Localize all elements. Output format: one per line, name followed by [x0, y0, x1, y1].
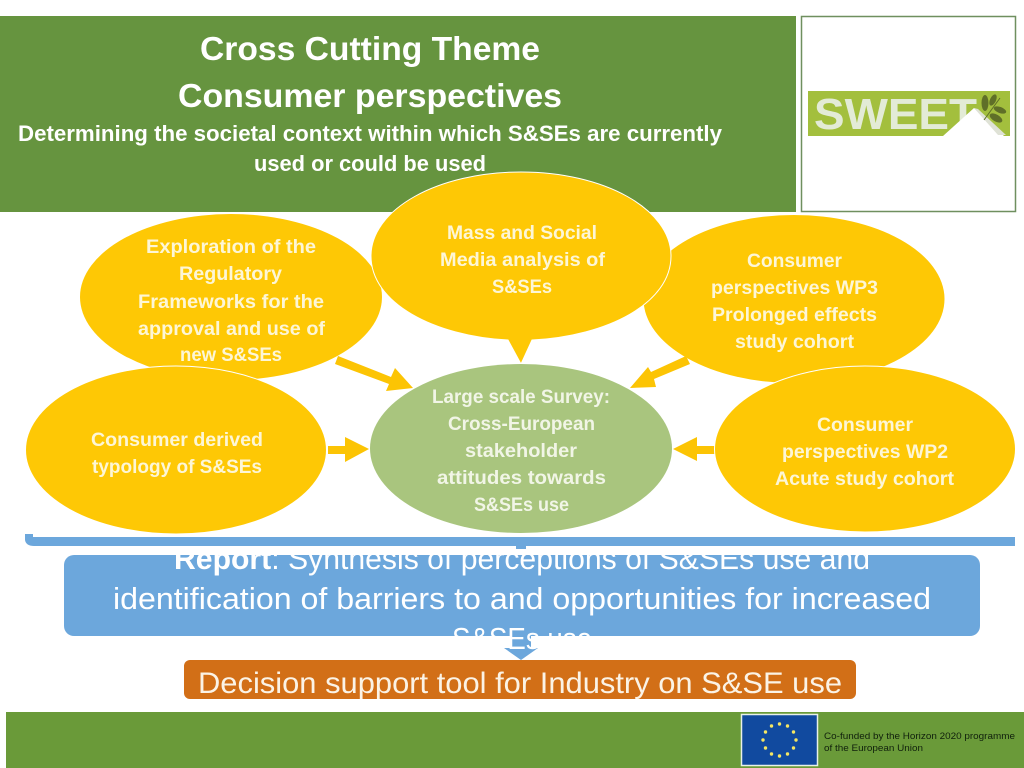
title — [178, 30, 562, 114]
bracket — [25, 534, 1015, 549]
oval: large scale survey: stakeholder — [465, 440, 577, 462]
funding note: Co-funded by the Horizon 2020 programme — [824, 731, 1015, 742]
callout: mass and social media analysis: Mass and Social — [447, 222, 597, 244]
oval: consumer derived typology: Consumer derived — [91, 429, 263, 451]
panel: report: Report: Synthesis of perceptions of S&SEs use and — [174, 541, 870, 576]
oval: consumer perspectives WP2: perspectives WP2 — [782, 441, 948, 463]
oval: consumer derived typology — [26, 366, 326, 534]
panel: report — [64, 541, 980, 656]
oval: regulatory frameworks: new S&SEs — [180, 344, 282, 366]
panel: SWEET logo — [802, 16, 1016, 212]
footer — [6, 712, 1024, 768]
oval: consumer perspectives WP3: Prolonged effects — [712, 304, 877, 326]
subtitle: Determining the societal context within which S&SEs are currently — [18, 121, 722, 146]
oval: large scale survey: S&SEs use — [474, 494, 569, 516]
panel: report: identification of barriers to and opportunities for increased — [113, 581, 931, 616]
icon: EU flag — [742, 714, 818, 766]
header banner — [0, 16, 796, 212]
oval: consumer perspectives WP3: perspectives WP3 — [711, 277, 878, 299]
arrow: typology to survey — [328, 437, 369, 462]
arrow: WP2 to survey — [673, 437, 715, 461]
oval: regulatory frameworks: Frameworks for the — [138, 291, 324, 313]
callout: mass and social media analysis: S&SEs — [492, 276, 552, 298]
oval: consumer perspectives WP2: Consumer — [817, 414, 913, 436]
title: Cross Cutting Theme — [200, 30, 540, 67]
subtitle: used or could be used — [254, 151, 486, 176]
oval: large scale survey: Large scale Survey: — [432, 386, 610, 408]
panel: decision support tool: Decision support tool for Industry on S&SE use — [198, 667, 842, 700]
oval: regulatory frameworks — [80, 214, 382, 380]
oval: regulatory frameworks: Regulatory — [179, 263, 282, 285]
funding note — [824, 731, 1015, 754]
oval: large scale survey: Cross-European — [448, 413, 595, 435]
oval: consumer perspectives WP3 — [644, 215, 944, 383]
panel: SWEET logo: SWEET — [814, 90, 977, 139]
callout: mass and social media analysis — [371, 172, 671, 364]
oval: regulatory frameworks: Exploration of the — [146, 236, 316, 258]
oval: consumer perspectives WP3: Consumer — [747, 250, 842, 272]
arrow: WP3 to survey — [630, 356, 690, 388]
oval: large scale survey — [370, 364, 672, 533]
oval: consumer perspectives WP3: study cohort — [735, 331, 855, 353]
callout: mass and social media analysis: Media analysis of — [440, 249, 606, 271]
oval: consumer perspectives WP2 — [714, 366, 1016, 532]
panel: report: S&SEs use — [452, 621, 592, 656]
arrow: report to decision tool — [504, 636, 538, 660]
funding note: of the European Union — [824, 743, 923, 754]
arrow: regulatory frameworks to survey — [335, 356, 413, 391]
subtitle — [18, 121, 722, 176]
oval: consumer derived typology: typology of S&SEs — [92, 456, 262, 478]
title: Consumer perspectives — [178, 77, 562, 114]
oval: consumer perspectives WP2: Acute study cohort — [775, 468, 955, 490]
oval: large scale survey: attitudes towards — [437, 467, 606, 489]
oval: regulatory frameworks: approval and use of — [138, 318, 326, 340]
